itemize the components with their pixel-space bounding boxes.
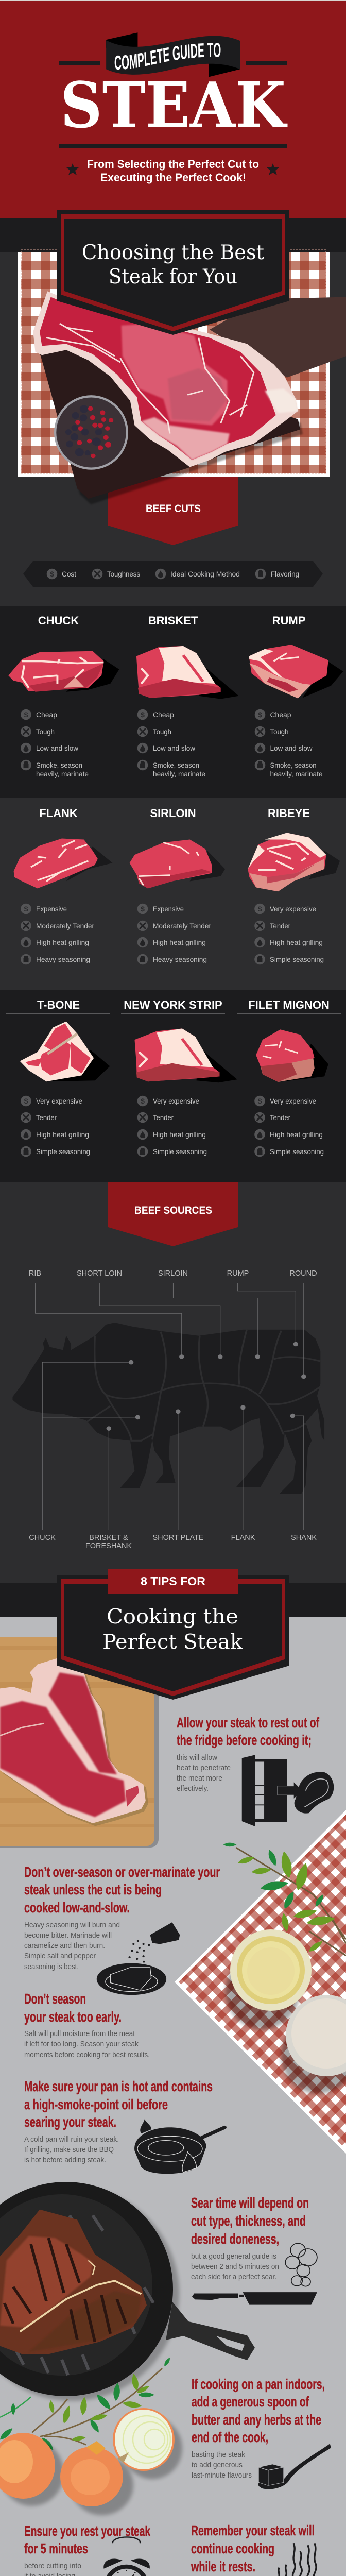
cut card: t-bone: T-BONE (37, 998, 80, 1011)
cow part labels: RIB (29, 1269, 41, 1278)
bowls of oil and sugar (226, 1929, 346, 2094)
cut card: t-bone: High heat grilling (36, 1130, 89, 1139)
cut card: rump: Low and slow (270, 744, 313, 752)
cow part labels: ROUND (289, 1269, 317, 1278)
cut card: rump: RUMP (272, 614, 305, 627)
cow part labels: RUMP (227, 1269, 249, 1278)
legend pill: Cost (62, 570, 76, 578)
tip 4: hot pan: a high-smoke-point oil before (24, 2096, 168, 2112)
cut card: ribeye: Tender (270, 922, 290, 930)
tip 1: rest out of fridge: this will allow (177, 1754, 217, 1762)
cut card: new york strip (121, 998, 237, 1157)
cut card: ribeye: Simple seasoning (270, 955, 324, 963)
legend pill (23, 561, 323, 587)
cut card: filet mignon: High heat grilling (270, 1130, 323, 1139)
tip 2: don't over-season: seasoning is best. (24, 1963, 79, 1971)
cow part labels: SHORT LOIN (77, 1269, 122, 1278)
icon: frying pan with smoke (192, 2243, 317, 2305)
tip 4: hot pan: searing your steak. (24, 2114, 116, 2130)
section title: cooking the perfect steak: Perfect Steak (102, 1631, 243, 1654)
tip 8: continues cooking: continue cooking (191, 2540, 274, 2556)
cut card: brisket: Smoke, season (153, 761, 199, 769)
cut card: new york strip: Simple seasoning (153, 1147, 207, 1156)
cut card: brisket: Tough (153, 727, 171, 736)
cut card: ribeye: RIBEYE (268, 807, 310, 820)
icon: fridge and steak (242, 1755, 334, 1826)
tip 4: hot pan: A cold pan will ruin your steak. (24, 2136, 119, 2144)
pepper bowl (54, 395, 128, 470)
tip 3: don't season too early: moments before cooking for best results. (24, 2051, 150, 2059)
subtitle: Executing the Perfect Cook! (100, 171, 246, 184)
tip 2: don't over-season: become bitter. Marinade will (24, 1931, 112, 1940)
label: beef cuts (108, 477, 238, 545)
cow part labels: SIRLOIN (158, 1269, 188, 1278)
cut card: flank (6, 807, 113, 964)
subtitle (66, 158, 279, 184)
cut card: rump: heavily, marinate (270, 770, 323, 778)
section title: cooking the perfect steak: Cooking the (107, 1605, 238, 1629)
tip 4: hot pan: If grilling, make sure the BBQ (24, 2146, 114, 2154)
ribbon banner: complete guide to: COMPLETE GUIDE TO (114, 43, 220, 70)
cut card: filet mignon: Simple seasoning (270, 1147, 324, 1156)
cut card: filet mignon (237, 998, 341, 1157)
cut card: chuck: CHUCK (38, 614, 79, 627)
tip 5: sear time: each side for a perfect sear. (191, 2273, 276, 2281)
tip 8: continues cooking: while it rests. (191, 2558, 255, 2574)
cut card: chuck: Tough (36, 727, 55, 736)
tip 5: sear time: between 2 and 5 minutes on (191, 2263, 279, 2271)
tip 2: don't over-season (24, 1864, 220, 1971)
cut card: rump: Smoke, season (270, 761, 316, 769)
label: beef sources (108, 1182, 238, 1246)
cow part labels (29, 1269, 317, 1550)
tip 5: sear time: desired doneness, (191, 2231, 279, 2247)
cut card: flank: High heat grilling (36, 938, 89, 946)
diagonal gingham tablecloth (175, 1810, 346, 2154)
label: beef sources: BEEF SOURCES (134, 1205, 212, 1216)
cut card: t-bone: Simple seasoning (36, 1147, 90, 1156)
cut card: ribeye: High heat grilling (270, 938, 323, 946)
tip 1: rest out of fridge: heat to penetrate (177, 1764, 231, 1772)
cut card: brisket (121, 614, 239, 778)
cut card: t-bone (6, 998, 110, 1157)
cow part labels: FLANK (231, 1534, 255, 1542)
tip 3: don't season too early: Don’t season (24, 1991, 86, 2007)
wooden board under raw steak (33, 297, 346, 504)
tip 2: don't over-season: Simple salt and pepper (24, 1952, 96, 1960)
tip 2: don't over-season: Don’t over-season or over-marinate your (24, 1864, 220, 1880)
cut card: new york strip: Very expensive (153, 1097, 199, 1105)
section header: 8 tips (57, 1575, 289, 1700)
gingham tablecloth (18, 250, 330, 477)
header ornaments: side rules (59, 61, 287, 148)
cut card: chuck: heavily, marinate (36, 770, 89, 778)
herbs on tablecloth (223, 1843, 346, 1956)
cut card: new york strip: Tender (153, 1113, 174, 1122)
section header: choosing the best steak (57, 210, 289, 335)
cut card: sirloin: Moderately Tender (153, 922, 211, 930)
tip 3: don't season too early (24, 1991, 150, 2059)
cut card: ribeye (237, 807, 341, 964)
icon: steaming plated steak (263, 2543, 334, 2576)
raw tomahawk steak photo (33, 291, 298, 467)
cut card: sirloin: SIRLOIN (150, 807, 196, 820)
tip 3: don't season too early: your steak too early. (24, 2009, 122, 2025)
cow part labels: BRISKET & (89, 1534, 128, 1542)
cut card: sirloin (121, 807, 225, 964)
cut card: ribeye: Very expensive (270, 905, 316, 913)
legend pill: Toughness (107, 570, 140, 578)
tip 8: continues cooking (191, 2522, 315, 2576)
tip 7: rest for 5 minutes: Ensure you rest your steak (24, 2523, 150, 2539)
cut card: chuck: Smoke, season (36, 761, 82, 769)
tip 5: sear time: but a good general guide is (191, 2252, 276, 2261)
cut card: t-bone: Very expensive (36, 1097, 82, 1105)
cut card: filet mignon: Very expensive (270, 1097, 316, 1105)
section title: choosing the best steak for you: Steak for You (109, 265, 237, 289)
label: beef cuts: BEEF CUTS (146, 503, 201, 515)
main title: steak: STEAK (60, 68, 288, 142)
section title: choosing the best steak for you (82, 241, 264, 289)
cut card: new york strip: High heat grilling (153, 1130, 206, 1139)
icon: salt shaker over plated steak (97, 1922, 180, 1995)
cow part labels: FORESHANK (85, 1542, 132, 1550)
tip 2: don't over-season: Heavy seasoning will burn and (24, 1921, 120, 1929)
tip 6: baste with butter: basting the steak (192, 2451, 246, 2459)
cut card: chuck: Cheap (36, 710, 57, 719)
tip 6: baste with butter: to add generous (192, 2461, 243, 2469)
label: 8 tips for (108, 1569, 238, 1594)
cast iron skillet (0, 2182, 255, 2401)
tip 6: baste with butter (192, 2376, 325, 2480)
tip 6: baste with butter: last-minute flavours (192, 2471, 252, 2480)
cut card: sirloin: Heavy seasoning (153, 955, 207, 963)
section title: cooking the perfect steak (102, 1605, 243, 1654)
tip 2: don't over-season: cooked low-and-slow. (24, 1900, 130, 1916)
cut card: flank: FLANK (39, 807, 78, 820)
cut card: rump: Cheap (270, 710, 291, 719)
tip 3: don't season too early: Salt will pull moisture from the meat (24, 2030, 135, 2038)
tip 6: baste with butter: end of the cook, (192, 2429, 268, 2445)
section title: choosing the best steak for you: Choosing the Best (82, 241, 264, 264)
cow part labels: SHORT PLATE (152, 1534, 204, 1542)
tip 4: hot pan (24, 2078, 213, 2164)
onions (0, 2408, 182, 2515)
tip 2: don't over-season: caramelize and then burn. (24, 1942, 105, 1950)
label: 8 tips for: 8 TIPS FOR (141, 1574, 205, 1588)
tip 4: hot pan: is hot before adding steak. (24, 2156, 106, 2164)
cut card: brisket: BRISKET (148, 614, 198, 627)
legend pill: Flavoring (271, 570, 299, 578)
tip 1: rest out of fridge: the meat more (177, 1774, 222, 1783)
cut card: filet mignon: FILET MIGNON (248, 998, 330, 1011)
cut card: flank: Moderately Tender (36, 922, 94, 930)
cut card: t-bone: Tender (36, 1113, 57, 1122)
connector lines and source dots (36, 1283, 306, 1530)
cut card: rump (237, 614, 343, 778)
herbs below skillet (0, 2357, 171, 2452)
raw t-bone steak photo (0, 1658, 148, 1826)
tip 1: rest out of fridge: effectively. (177, 1785, 209, 1793)
ribbon banner: complete guide to (106, 32, 240, 77)
tip 3: don't season too early: if left for too long. Season your steak (24, 2040, 139, 2048)
cut card: brisket: heavily, marinate (153, 770, 205, 778)
icon: butter on spoon (258, 2444, 331, 2489)
tip 7: rest for 5 minutes: for 5 minutes (24, 2540, 88, 2556)
cut card: sirloin: High heat grilling (153, 938, 206, 946)
cut card: flank: Heavy seasoning (36, 955, 90, 963)
tip 4: hot pan: Make sure your pan is hot and contains (24, 2078, 213, 2094)
cut card: new york strip: NEW YORK STRIP (124, 998, 222, 1011)
cut card: chuck: Low and slow (36, 744, 79, 752)
cut card: brisket: Cheap (153, 710, 174, 719)
cow part labels: CHUCK (29, 1534, 56, 1542)
cut card: rump: Tough (270, 727, 288, 736)
icon: alarm clock (103, 2537, 150, 2576)
tip 7: rest for 5 minutes: before cutting into (24, 2562, 81, 2570)
legend pill: Ideal Cooking Method (170, 570, 240, 578)
tip 7: rest for 5 minutes (24, 2523, 150, 2576)
cut card: sirloin: Expensive (153, 905, 184, 913)
cut card: chuck (6, 614, 119, 778)
seared t-bone steak photo (0, 2210, 147, 2354)
cut card: filet mignon: Tender (270, 1113, 290, 1122)
tip 2: don't over-season: steak unless the cut is being (24, 1882, 162, 1897)
tip 5: sear time (191, 2195, 309, 2281)
cut card: brisket: Low and slow (153, 744, 196, 752)
tip 1: rest out of fridge (177, 1715, 319, 1793)
subtitle: From Selecting the Perfect Cut to (87, 158, 259, 171)
cow diagram with cut lines (12, 1323, 324, 1494)
icon: hot skillet with flames (134, 2119, 224, 2174)
cow part labels: SHANK (291, 1534, 317, 1542)
cutting board (0, 1637, 159, 1848)
cut card: flank: Expensive (36, 905, 67, 913)
